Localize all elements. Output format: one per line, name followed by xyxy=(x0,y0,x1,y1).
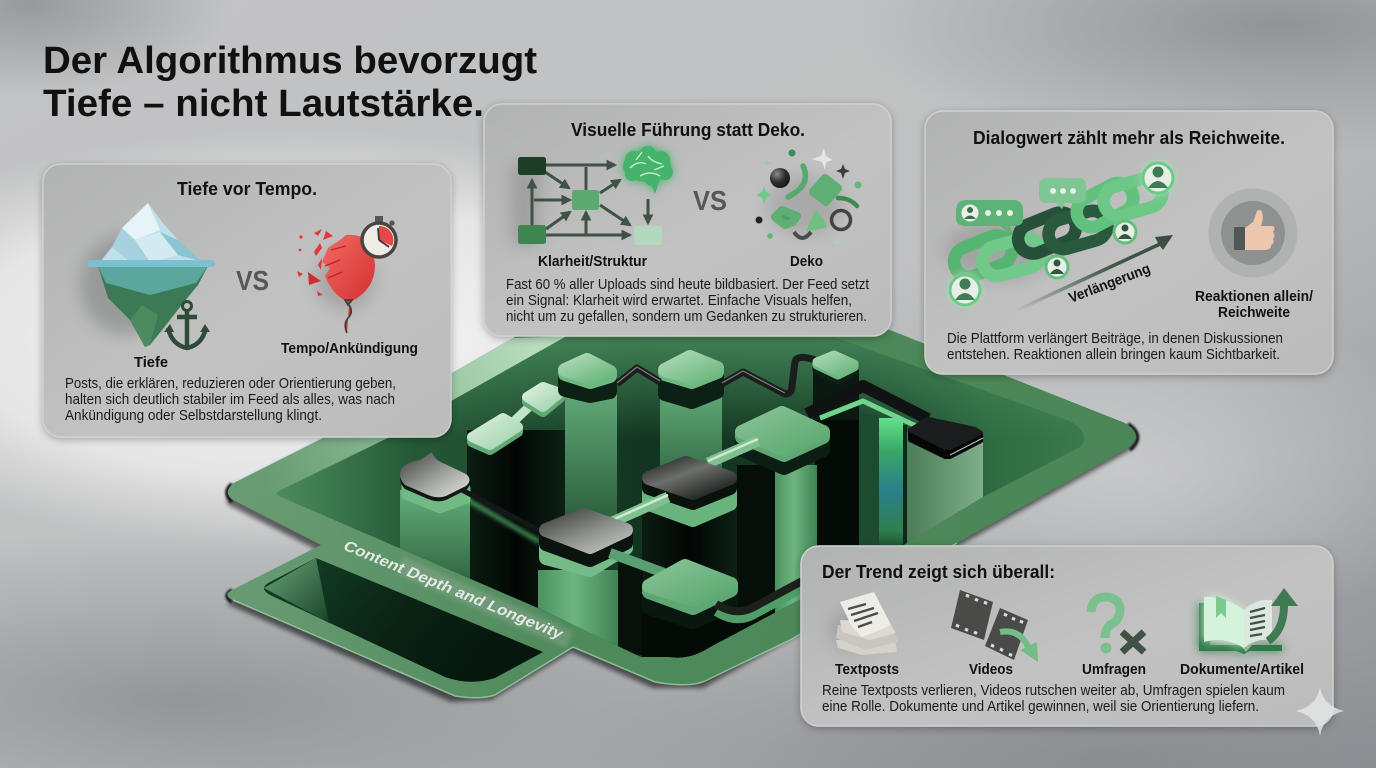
text block: halten sich deutlich stabiler im Feed als alles, was nach xyxy=(65,391,395,408)
text block: Fast 60 % aller Uploads sind heute bildbasiert. Der Feed setzt xyxy=(506,276,870,293)
pillar: right green with black cap xyxy=(807,386,983,552)
icon: open book with arrow xyxy=(1199,588,1298,654)
text block: Reine Textposts verlieren, Videos rutschen weiter ab, Umfragen spielen kaum xyxy=(822,682,1285,699)
title: Der Algorithmus bevorzugt xyxy=(43,40,537,82)
tab hole wall xyxy=(264,558,329,623)
text block: Posts, die erklären, reduzieren oder Orientierung geben, xyxy=(65,375,396,392)
label: Deko: Deko xyxy=(790,253,823,270)
text block: eine Rolle. Dokumente und Artikel gewinnen, weil sie Orientierung liefern. xyxy=(822,698,1259,715)
label: Reaktionen allein / Reichweite xyxy=(1195,288,1314,321)
title xyxy=(43,40,537,125)
VS: VS xyxy=(693,185,727,216)
tab hole xyxy=(264,558,543,682)
icon: thumbs up xyxy=(1208,188,1298,278)
label: Videos: Videos xyxy=(969,661,1013,678)
pillar: dark cap with green band xyxy=(642,463,737,665)
tray shadow xyxy=(227,336,1135,702)
pillar: gray cap green body xyxy=(538,515,643,660)
label: Reaktionen allein / Reichweite: Reaktionen allein/ xyxy=(1195,288,1314,305)
title: Tiefe – nicht Lautstärke. xyxy=(43,83,484,125)
arrow: extension xyxy=(1013,235,1173,313)
panel: Der Trend xyxy=(801,546,1333,726)
text block: ein Signal: Klarheit wird erwartet. Einfache Visuals helfen, xyxy=(506,292,852,309)
text block xyxy=(947,330,1283,363)
panel: Visuelle Führung xyxy=(484,104,891,336)
connector: light tube upper xyxy=(708,439,758,463)
connector: bottom black cable xyxy=(714,578,800,624)
icon: glowing brain xyxy=(623,146,673,194)
icon: bursting balloon with stopwatch xyxy=(297,216,396,333)
heading: Der Trend zeigt sich überall: xyxy=(822,561,1055,582)
pillar: tall light green xyxy=(565,360,617,520)
icon: iceberg with anchor xyxy=(80,203,215,348)
pillars and connectors xyxy=(400,355,983,665)
icon: sparkle mark xyxy=(1296,687,1344,736)
label: Tiefe: Tiefe xyxy=(134,354,168,371)
tray rim xyxy=(227,310,1136,698)
tray corner edges xyxy=(227,424,1138,602)
icon: question mark with X xyxy=(1091,597,1144,654)
text block xyxy=(65,375,396,424)
heading: Dialogwert zählt mehr als Reichweite. xyxy=(973,127,1285,148)
hole top light xyxy=(453,320,1067,440)
main hole xyxy=(276,320,1084,658)
connector: black and green L xyxy=(807,386,928,419)
text block: nicht um zu gefallen, sondern um Gedanken zu strukturieren. xyxy=(506,308,867,325)
pillar: small caps black body xyxy=(467,387,565,640)
label: Reaktionen allein / Reichweite: Reichweite xyxy=(1218,304,1290,321)
connector: light tube middle xyxy=(610,495,668,523)
pillar: back center xyxy=(660,357,722,495)
connector: tube to lower cap xyxy=(610,553,664,573)
connector: black line to gray cap xyxy=(462,490,542,542)
label: Textposts: Textposts xyxy=(835,661,899,678)
heading: Tiefe vor Tempo. xyxy=(177,178,317,199)
text strip sheen xyxy=(400,565,570,640)
text block: Ankündigung oder Selbstdarstellung klingt. xyxy=(65,407,322,424)
panel: Tiefe vor Tempo xyxy=(43,164,451,437)
pillar: small back right xyxy=(812,350,859,420)
label: Dokumente/Artikel: Dokumente/Artikel xyxy=(1180,661,1304,678)
3D tray: content depth and longevity xyxy=(227,310,1138,702)
heading: Visuelle Führung statt Deko. xyxy=(571,119,805,140)
VS: VS xyxy=(236,265,269,296)
label: Umfragen: Umfragen xyxy=(1082,661,1146,678)
icon: broken film xyxy=(951,590,1038,662)
strip label: Content Depth and Longevity xyxy=(340,538,567,643)
rim highlight xyxy=(229,336,570,498)
panel: Dialogwert xyxy=(925,111,1333,374)
connector: back black cable xyxy=(617,357,815,394)
icon: torn paper stack xyxy=(830,592,898,655)
pillar: center right green xyxy=(737,413,823,645)
pillar: lower light cap xyxy=(642,566,738,665)
icon: flow diagram xyxy=(510,157,662,245)
label: Tempo/Ankündigung: Tempo/Ankündigung xyxy=(281,340,418,357)
text block: Die Plattform verlängert Beiträge, in denen Diskussionen xyxy=(947,330,1283,347)
icon: decorative shapes xyxy=(756,148,862,247)
text block: entstehen. Reaktionen allein bringen kaum Sichtbarkeit. xyxy=(947,346,1280,363)
text block xyxy=(822,682,1285,715)
rim edge light xyxy=(233,543,957,698)
label: Verlängerung: Verlängerung xyxy=(1067,261,1153,307)
icon: conversation chain xyxy=(945,163,1173,305)
text block xyxy=(506,276,870,325)
label: Klarheit/Struktur: Klarheit/Struktur xyxy=(538,253,647,270)
pillar: left cap with green body xyxy=(400,452,470,590)
